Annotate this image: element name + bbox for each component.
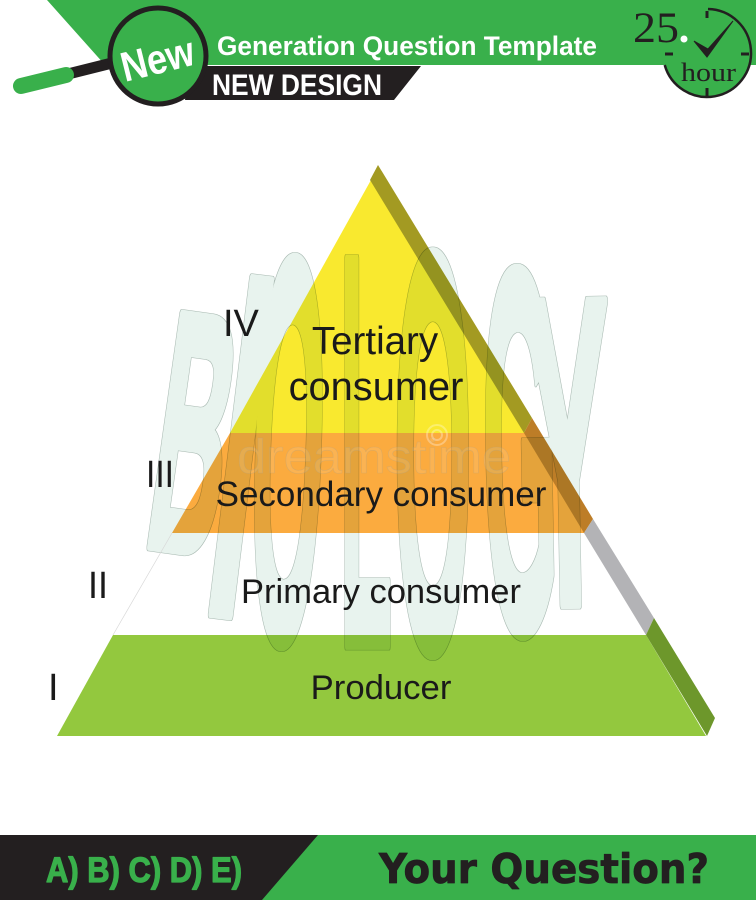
label: secondary consumer: Secondary consumer — [216, 475, 547, 514]
footer question text: Your Question? — [378, 845, 709, 893]
footer black panel with answer choices — [0, 835, 318, 900]
BIOLOGY watermark: G — [478, 162, 562, 743]
pyramid side strip: dark green — [646, 618, 715, 736]
roman numeral II: II — [88, 565, 108, 607]
label: tertiary consumer: Tertiary — [312, 320, 439, 363]
label: consumer: consumer — [289, 365, 463, 409]
pyramid — [57, 165, 715, 736]
BIOLOGY watermark: L — [340, 137, 392, 764]
header green banner — [47, 0, 756, 65]
primary consumer tier outline — [113, 533, 172, 635]
roman numeral I: I — [48, 667, 59, 709]
label: primary consumer: Primary consumer — [241, 573, 521, 611]
label: producer: Producer — [311, 669, 451, 707]
pyramid tier: tertiary (yellow) — [230, 180, 525, 433]
pyramid tier: secondary (orange) — [172, 433, 585, 533]
pyramid side strip: grey — [584, 519, 654, 635]
BIOLOGY watermark: B — [132, 241, 256, 628]
BIOLOGY watermark: I — [187, 172, 295, 720]
icon: 25 hour clock — [633, 5, 751, 97]
roman numeral III: III — [146, 454, 174, 496]
footer black panel with answer choices: A) B) C) D) E) — [46, 851, 242, 890]
footer green band — [0, 835, 756, 900]
icon: magnifying glass — [21, 8, 206, 104]
header title: Generation Question Template — [217, 31, 597, 61]
BIOLOGY watermark: O — [242, 142, 335, 760]
icon: 25 hour clock: 25 — [633, 5, 679, 52]
pyramid tier: producer (green) — [57, 635, 706, 736]
dreamstime watermark: dreamstime — [237, 431, 511, 484]
icon: 25 hour clock: hour — [681, 58, 736, 87]
pyramid side strip: olive — [370, 165, 532, 433]
black sub-banner: NEW DESIGN — [212, 69, 382, 102]
BIOLOGY watermark: Y — [521, 206, 615, 699]
BIOLOGY watermark: O — [394, 135, 472, 771]
icon: magnifying glass: New — [116, 27, 199, 91]
BIOLOGY watermark — [132, 135, 615, 771]
roman numeral IV: IV — [223, 303, 260, 345]
pyramid side strip: brown — [524, 418, 593, 533]
